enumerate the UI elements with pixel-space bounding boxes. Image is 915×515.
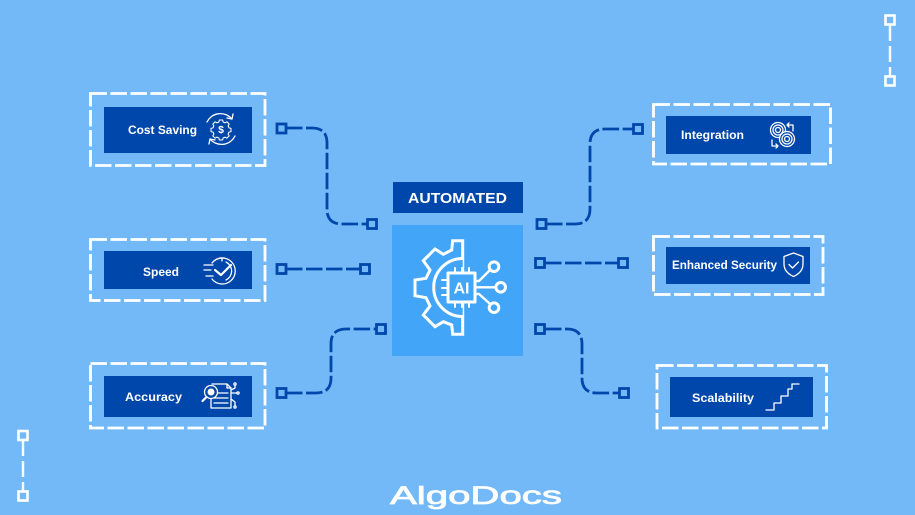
connector: Speed to center — [277, 264, 370, 274]
connector: Scalability to center — [536, 324, 628, 398]
connector: Enhanced Security to center — [536, 258, 628, 268]
label: Accuracy: Accuracy — [125, 390, 182, 404]
panel: Enhanced Security — [654, 236, 823, 294]
icon: document with magnifier and circuits — [202, 383, 239, 408]
icon: interlocking gears with arrows — [770, 122, 794, 148]
label: Integration: Integration — [681, 128, 744, 142]
panel: Scalability — [657, 366, 826, 428]
label: Enhanced Security: Enhanced Security — [672, 258, 777, 272]
decoration: top-right connector — [886, 16, 894, 86]
logo: AlgoDocs: AlgoDocs — [390, 482, 562, 510]
icon: stairs — [766, 384, 799, 410]
heading: AUTOMATED: AUTOMATED — [408, 191, 507, 207]
panel: Accuracy — [90, 364, 265, 428]
heading: AUTOMATED — [393, 182, 523, 213]
icon: stopwatch with check mark — [204, 258, 235, 284]
label: Cost Saving: Cost Saving — [128, 123, 197, 137]
icon: AI gear with circuit — [415, 241, 506, 334]
label: Speed: Speed — [143, 265, 179, 279]
panel: Speed — [90, 240, 265, 300]
decoration: bottom-left connector — [18, 431, 28, 500]
icon: gear with dollar sign and circular arrows — [207, 114, 235, 144]
connector: Accuracy to center — [277, 324, 386, 398]
label: Scalability: Scalability — [692, 391, 754, 405]
connector: Integration to center — [537, 124, 642, 228]
connector: Cost Saving to center — [277, 124, 376, 228]
panel: central AI tile: AI — [454, 280, 470, 298]
icon: gear with dollar sign and circular arrows: $ — [218, 124, 224, 136]
icon: shield with check mark — [784, 253, 803, 276]
panel: central AI tile — [392, 225, 523, 356]
panel: Cost Saving — [90, 94, 265, 166]
panel: Integration — [654, 104, 830, 164]
